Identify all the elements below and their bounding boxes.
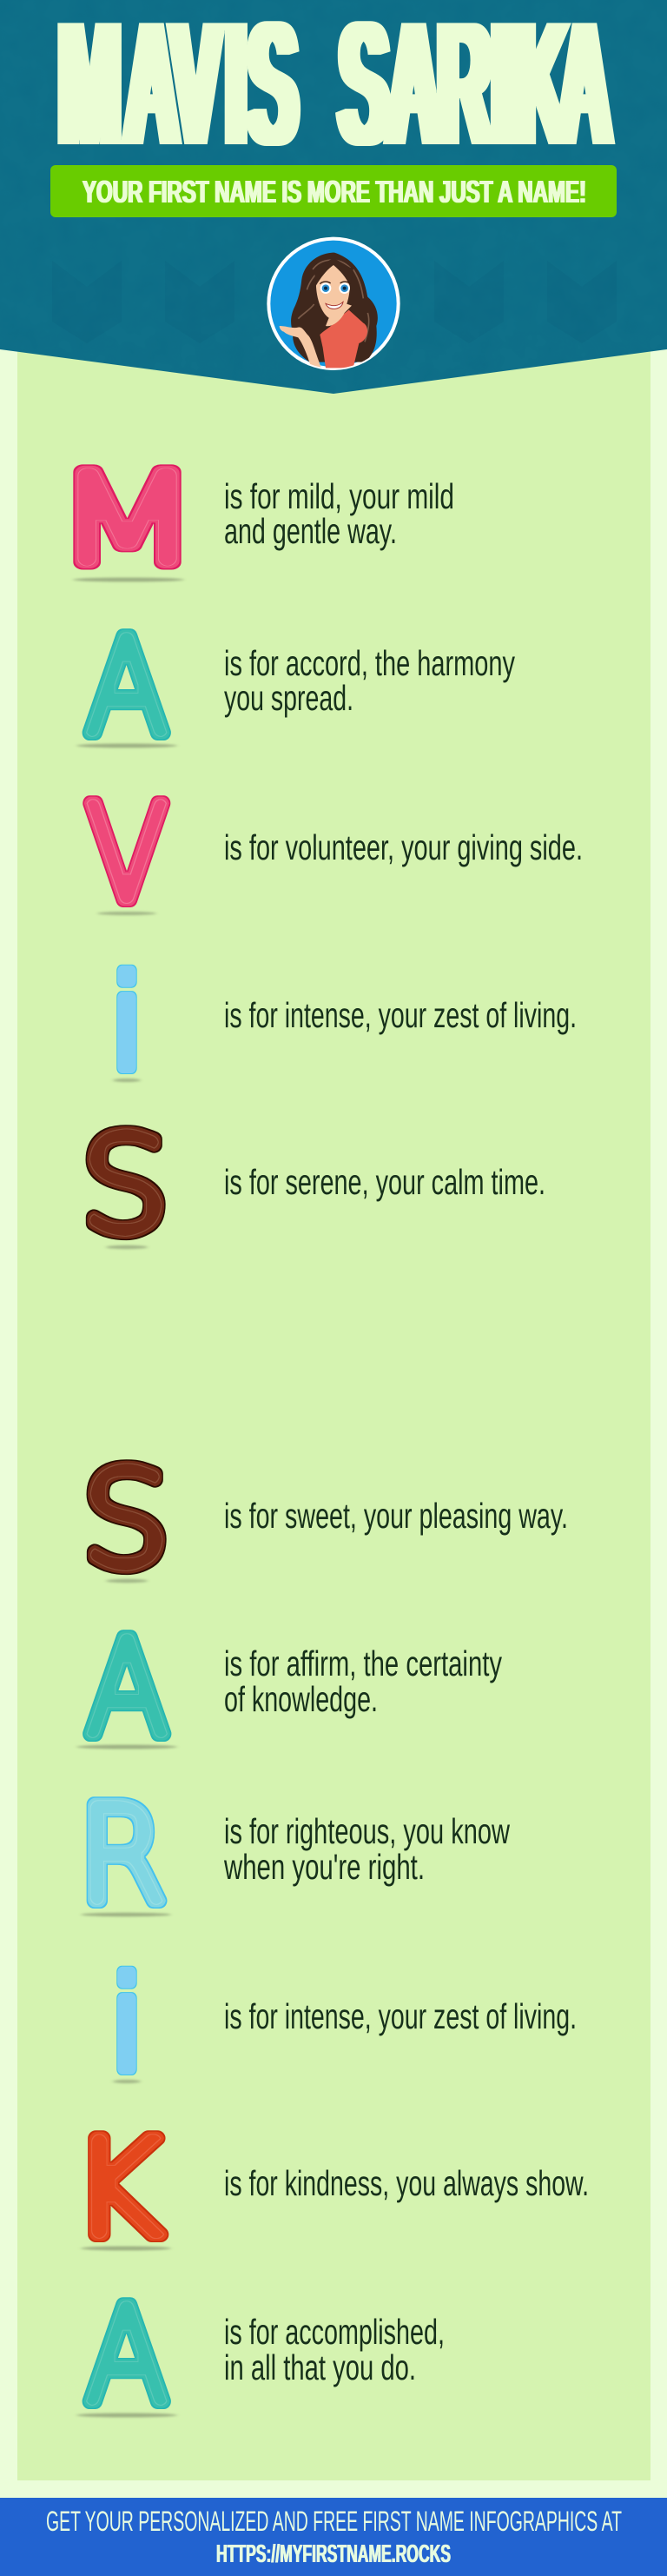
text A <box>224 643 515 718</box>
row: A (last) <box>76 2280 445 2433</box>
row: R <box>78 1779 510 1933</box>
panel: letters background <box>17 339 650 2480</box>
row: I (second name) <box>113 1949 577 2098</box>
row: S <box>82 1108 545 1262</box>
text M: is for mild, your mild <box>224 476 454 516</box>
avatar: woman portrait in circle <box>267 237 400 370</box>
footer url: HTTPS://MYFIRSTNAME.ROCKS <box>216 2540 451 2568</box>
letter K: K <box>72 2112 162 2266</box>
text A: of knowledge. <box>224 1679 378 1719</box>
letter A: A <box>86 2280 168 2433</box>
text M <box>224 476 454 551</box>
row: V <box>86 778 583 932</box>
row: M <box>56 448 454 592</box>
text A: is for accord, the harmony <box>224 643 515 683</box>
letter I: i <box>114 947 140 1097</box>
text A: in all that you do. <box>224 2347 416 2387</box>
row: K <box>72 2112 589 2266</box>
row: A (second name) <box>76 1612 502 1766</box>
text R <box>223 1811 510 1887</box>
text A: you spread. <box>224 678 353 718</box>
row: S (second name) <box>83 1443 568 1597</box>
text A <box>224 2312 445 2387</box>
footer <box>0 2498 667 2576</box>
text A: is for accomplished, <box>224 2312 445 2352</box>
text A <box>224 1643 502 1719</box>
letter S: S <box>83 1443 169 1597</box>
row: A <box>76 611 515 765</box>
row: I <box>113 947 577 1097</box>
letter A: A <box>86 1612 168 1766</box>
letter R: R <box>78 1779 167 1933</box>
header banner <box>0 0 667 400</box>
title <box>59 0 611 182</box>
text R: is for righteous, you know <box>224 1811 510 1851</box>
letter S: S <box>82 1108 168 1262</box>
text M: and gentle way. <box>224 511 397 551</box>
letter A: A <box>86 611 168 765</box>
subtitle bar <box>50 165 617 217</box>
text R: when you're right. <box>223 1847 425 1887</box>
letter V: V <box>86 778 168 932</box>
letter I: i <box>114 1949 140 2098</box>
letter M: M <box>56 448 198 592</box>
text A: is for affirm, the certainty <box>224 1643 502 1683</box>
